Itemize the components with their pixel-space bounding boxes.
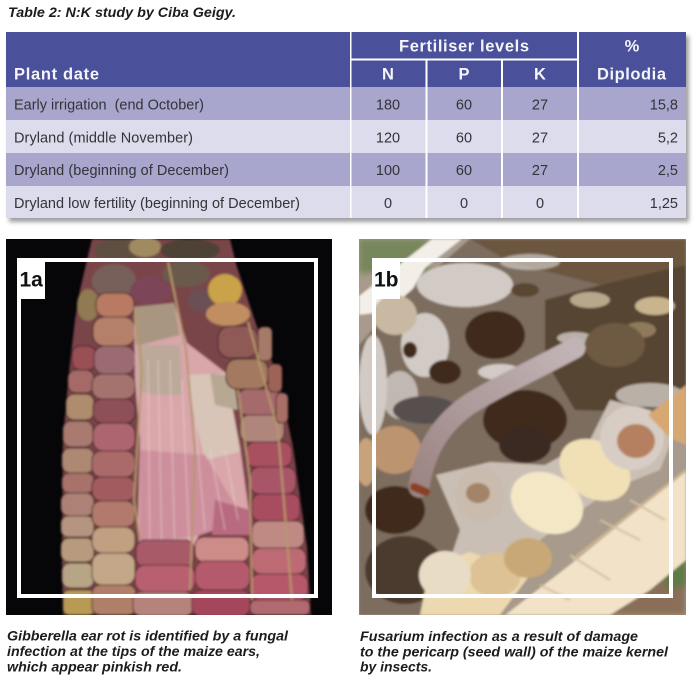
diplodia values: 15,8 [650,98,678,114]
caption 1b: Fusarium infection as a result of damage [360,629,638,645]
caption 1b: by insects. [360,660,432,676]
header labels: % [625,38,640,56]
header labels: P [458,66,470,84]
header labels: Fertiliser levels [399,38,529,56]
header labels: N [382,66,394,84]
right kernel columns [218,326,310,615]
worm [414,348,575,492]
fertiliser values: 100 [376,163,400,179]
photo 1a label [17,258,45,299]
header labels [14,38,667,84]
diplodia values: 1,25 [650,196,678,212]
fertiliser values: 0 [460,196,468,212]
fertiliser values: 180 [376,98,400,114]
fertiliser values [376,98,548,212]
mouldy mass [359,239,686,615]
diplodia values: 5,2 [658,130,678,146]
photo 1b label [372,258,400,299]
fertiliser values: 60 [456,163,472,179]
fertiliser values: 60 [456,98,472,114]
left orange kernels [356,426,421,486]
header labels: Diplodia [597,66,667,84]
bark fibres [148,360,238,560]
caption 1a: infection at the tips of the maize ears, [7,644,260,660]
photo 1b label: 1b [374,268,399,292]
brown damaged kernels [464,384,686,505]
fertiliser values: 60 [456,130,472,146]
diplodia values [650,98,678,212]
caption 1a: which appear pinkish red. [7,660,182,676]
caption 1b: to the pericarp (seed wall) of the maize kernel [360,644,669,660]
row labels: Dryland (beginning of December) [14,163,229,179]
fertiliser values: 0 [536,196,544,212]
photo 1b frame [374,260,671,596]
top husk remnants [77,237,250,326]
cream kernels [419,426,686,615]
data table [6,32,689,222]
photo 1a: maize ear with Gibberella rot [6,237,332,616]
title: Table 2: N:K study by Ciba Geigy. [8,4,236,20]
second kernel column [92,293,136,615]
row bands [6,87,686,218]
photo 1b: worm damaged maize ear [356,239,686,615]
dark debris upper right [545,262,686,412]
fertiliser values: 27 [532,130,548,146]
caption 1b [360,629,669,676]
blurred field background [359,239,686,615]
caption 1a [7,628,289,676]
fertiliser values: 120 [376,130,400,146]
mould rim around kernels [435,398,669,558]
diplodia values: 2,5 [658,163,678,179]
centre lower kernels [133,537,250,616]
header labels: Plant date [14,66,99,84]
photo 1a label: 1a [20,268,43,292]
left kernel column [61,346,96,615]
ear body [62,239,311,615]
row labels: Dryland (middle November) [14,130,193,146]
header labels: K [534,66,546,84]
caption 1a: Gibberella ear rot is identified by a fungal [7,628,289,644]
row labels: Early irrigation (end October) [14,98,204,114]
brown cavities [365,283,567,604]
white mould patches [359,254,684,435]
table header background [6,32,686,87]
row labels: Dryland low fertility (beginning of December) [14,196,300,212]
fertiliser values: 27 [532,163,548,179]
fertiliser values: 0 [384,196,392,212]
husk fibres [134,262,292,600]
row labels [14,98,300,212]
photo 1a frame [19,260,316,596]
fertiliser values: 27 [532,98,548,114]
pale bark sheet [134,303,250,565]
